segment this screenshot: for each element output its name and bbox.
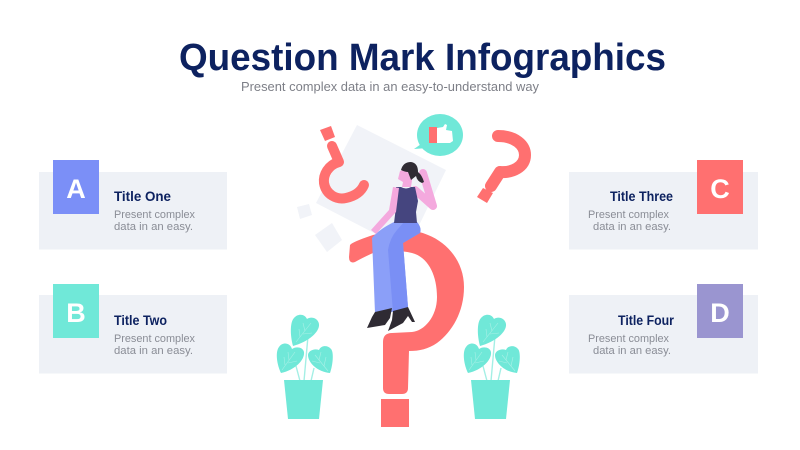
plant: right (464, 315, 520, 419)
badge: D (697, 284, 743, 338)
text: description one: data in an easy. (114, 221, 193, 233)
leaf: top (291, 315, 319, 346)
heading: Title Two: Title Two (114, 313, 167, 328)
text: description two: Present complex (114, 333, 195, 345)
pot (471, 380, 510, 419)
badge: C (697, 160, 743, 214)
icon: tilted question mark (477, 136, 525, 203)
badge: C: C (710, 174, 730, 204)
question mark dot (381, 399, 409, 427)
panel: A Title One (39, 160, 227, 250)
raised arm (415, 173, 433, 206)
subtitle: Present complex data in an easy-to-understand way (241, 79, 539, 94)
icon: inverted question mark (320, 126, 364, 198)
pot (284, 380, 323, 419)
hair (401, 162, 424, 183)
leaf: right (308, 346, 333, 373)
jeans near leg (388, 222, 421, 312)
leaf veins (282, 323, 328, 371)
icon: thumbs-up speech bubble (414, 114, 463, 156)
stems (296, 336, 314, 381)
title: Question Mark Infographics (179, 37, 666, 79)
badge: B: B (66, 298, 86, 328)
panel: D Title Four (569, 284, 758, 374)
woman sitting on question mark (367, 162, 433, 331)
leaf: top (478, 315, 506, 346)
badge: A: A (66, 174, 86, 204)
leaf veins (469, 323, 515, 371)
text: description four: Present complex (588, 333, 669, 345)
panel: B Title Two (39, 284, 227, 374)
panel: C Title Three (569, 160, 758, 250)
neck and face (398, 168, 413, 187)
badge: A (53, 160, 99, 214)
heading: Title One: Title One (114, 189, 171, 204)
tank top (394, 187, 418, 223)
background squares (297, 125, 446, 252)
big question mark (349, 230, 464, 427)
stems (483, 336, 501, 381)
boots (367, 307, 415, 331)
text: description four: data in an easy. (593, 345, 671, 357)
leaf: right (495, 346, 520, 373)
plant: left (277, 315, 333, 419)
text: description two: data in an easy. (114, 345, 193, 357)
text: description one: Present complex (114, 209, 195, 221)
lower arm (371, 187, 399, 234)
badge: B (53, 284, 99, 338)
text: description three: Present complex (588, 209, 669, 221)
text: description three: data in an easy. (593, 221, 671, 233)
heading: Title Four: Title Four (618, 313, 675, 328)
leaf: left (277, 343, 304, 373)
leaf: left (464, 343, 491, 373)
heading: Title Three: Title Three (610, 189, 673, 204)
badge: D: D (710, 298, 730, 328)
jeans (372, 222, 421, 313)
